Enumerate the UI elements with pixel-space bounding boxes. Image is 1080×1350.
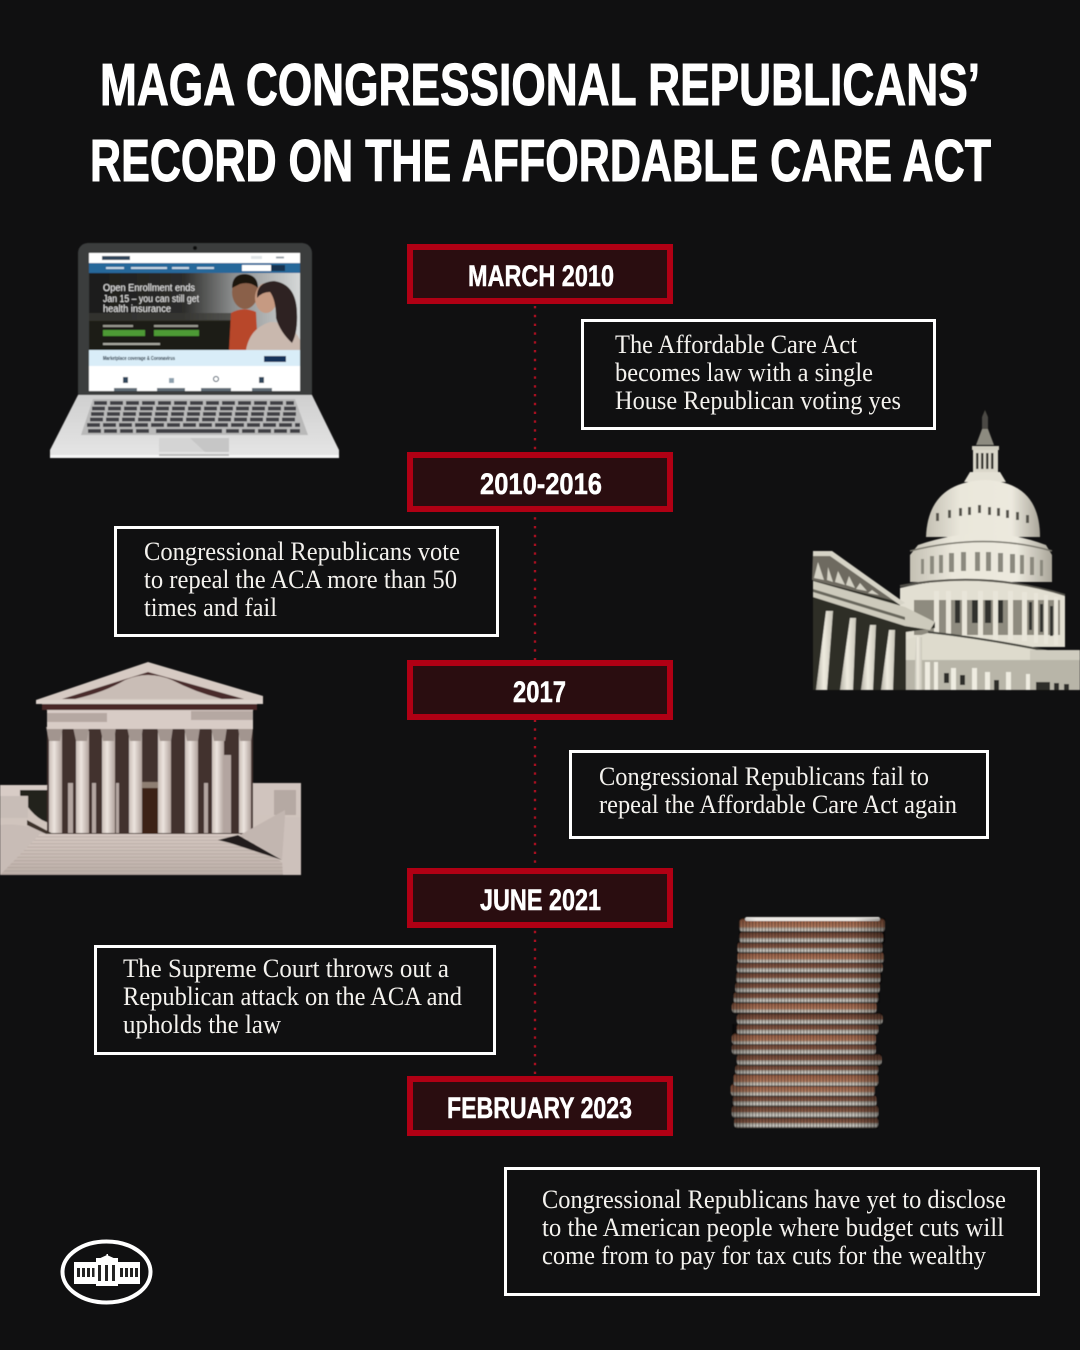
text box: ACA becomes law: House Republican voting yes [615,386,901,415]
date label: June 2021 [410,871,670,925]
text box: fail to repeal again [570,752,988,838]
text box: Supreme Court upholds: upholds the law [123,1010,281,1039]
title [90,52,991,194]
date label: March 2010 [410,247,670,301]
image: laptop showing HealthCare.gov: Jan 15 – you can still get [103,294,199,305]
text box: fail to repeal again: Congressional Republicans fail to [599,762,929,791]
date label: 2017 [410,663,670,717]
image: laptop showing HealthCare.gov: Marketplace coverage & Coronavirus [103,356,175,362]
text box: ACA becomes law [582,320,934,428]
image: US Capitol building [812,410,1080,690]
date label: 2010-2016 [410,455,670,509]
date label: 2017: 2017 [513,676,566,709]
text box: budget cuts undisclosed [506,1168,1038,1294]
text box: repeal votes: times and fail [144,593,277,622]
date label: March 2010: MARCH 2010 [468,260,614,293]
image: stack of coins [728,917,886,1129]
text box: Supreme Court upholds: Republican attack on the ACA and [123,982,462,1011]
text box: ACA becomes law: The Affordable Care Act [615,330,858,359]
timeline dotted line [534,306,536,1076]
date label: February 2023 [410,1079,670,1133]
date label: February 2023: FEBRUARY 2023 [447,1092,632,1125]
image: Supreme Court building [0,662,301,875]
text box: repeal votes: to repeal the ACA more than 50 [144,565,457,594]
image: laptop showing HealthCare.gov: health insurance [103,304,171,315]
image: laptop showing HealthCare.gov: Open Enrollment ends [103,283,195,294]
text box: repeal votes [116,528,498,636]
image: laptop showing HealthCare.gov [50,243,339,458]
text box: budget cuts undisclosed: to the American people where budget cuts will [542,1213,1004,1242]
icon: White House logo [62,1242,150,1302]
date label: 2010-2016: 2010-2016 [480,468,602,501]
text box: Supreme Court upholds [96,946,494,1054]
text box: Supreme Court upholds: The Supreme Court throws out a [123,954,449,983]
text box: ACA becomes law: becomes law with a single [615,358,873,387]
text box: budget cuts undisclosed: come from to pay for tax cuts for the wealthy [542,1241,986,1270]
text box: budget cuts undisclosed: Congressional Republicans have yet to disclose [542,1185,1006,1214]
text box: repeal votes: Congressional Republicans vote [144,537,460,566]
date label: June 2021: JUNE 2021 [480,884,601,917]
text box: fail to repeal again: repeal the Affordable Care Act again [599,790,957,819]
